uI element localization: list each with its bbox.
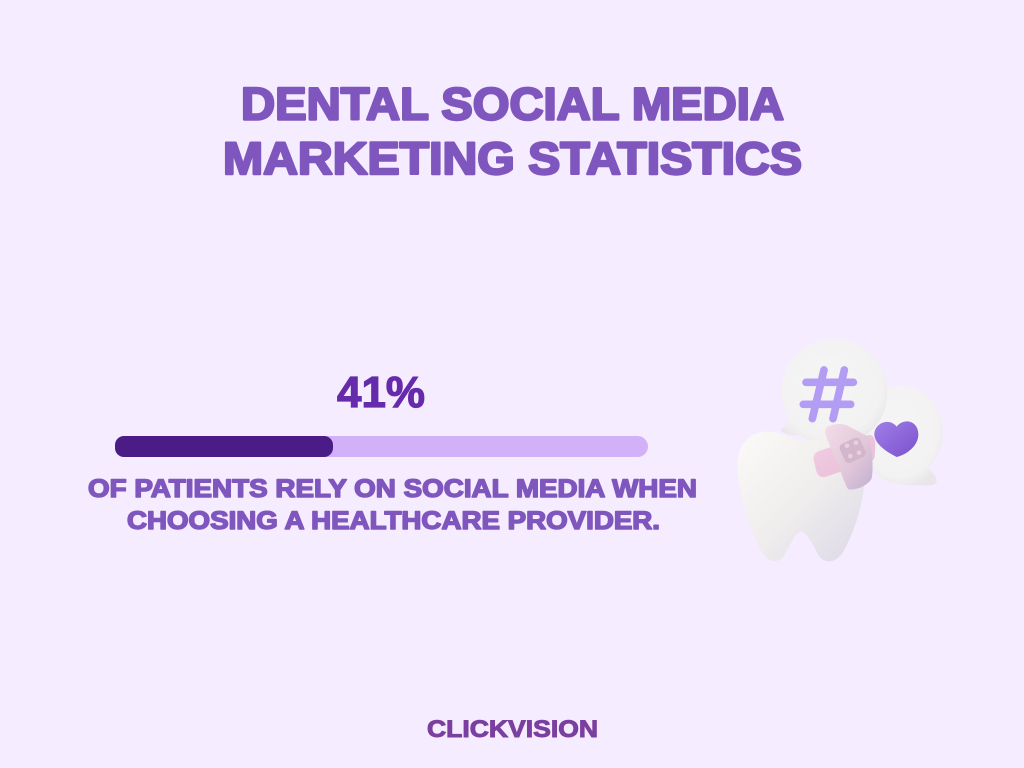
bandage pad with dots xyxy=(838,436,867,464)
hashtag xyxy=(803,370,853,419)
statistic value: 41%: 41% xyxy=(337,368,425,417)
title: DENTAL SOCIAL MEDIA xyxy=(241,78,784,130)
statistic description: OF PATIENTS RELY ON SOCIAL MEDIA WHEN xyxy=(88,475,697,503)
statistic description xyxy=(88,475,697,535)
title: MARKETING STATISTICS xyxy=(223,133,802,184)
heart xyxy=(874,421,918,457)
tooth xyxy=(737,431,864,561)
title xyxy=(223,78,802,184)
logo: ClickVision: CLICKVISION xyxy=(427,716,598,743)
speech bubble with heart xyxy=(863,386,943,486)
icon: tooth with bandage and social speech bubbles xyxy=(737,339,943,561)
progress bar xyxy=(115,436,648,457)
speech bubble with hashtag xyxy=(780,339,887,445)
progress bar fill: 41% xyxy=(115,436,333,457)
bandage xyxy=(814,424,875,490)
statistic description: CHOOSING A HEALTHCARE PROVIDER. xyxy=(127,507,660,535)
